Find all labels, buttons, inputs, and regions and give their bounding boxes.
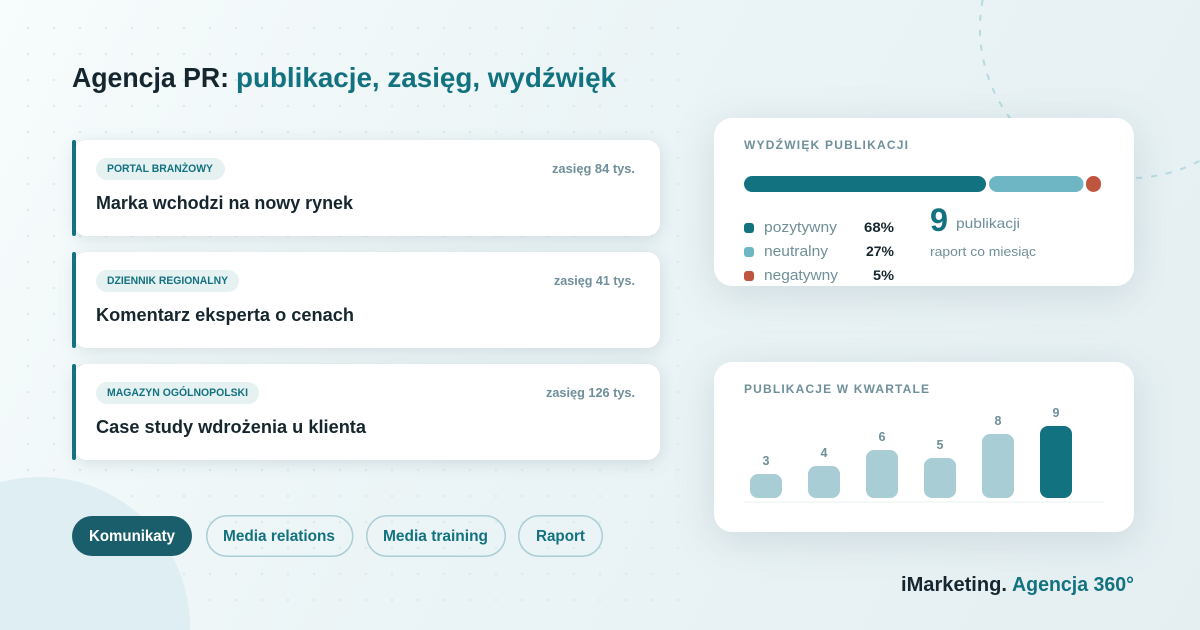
service pills	[72, 516, 602, 556]
bar chart	[744, 406, 1104, 503]
panel: publication card 2: DZIENNIK REGIONALNY	[107, 275, 229, 287]
brand footer	[901, 574, 1134, 596]
service pills: Media training	[383, 528, 488, 545]
publication count: publikacji	[956, 215, 1020, 231]
panel: publication card 1: Marka wchodzi na nowy rynek	[96, 192, 354, 213]
service pills: Media relations	[223, 528, 335, 545]
sentiment legend: 5%	[873, 268, 894, 283]
publication count: raport co miesiąc	[930, 244, 1037, 259]
bar chart: 3	[763, 454, 770, 468]
title: Agencja PR:	[72, 62, 229, 93]
panel: publication card 1	[72, 140, 660, 236]
panel: publication card 1: zasięg 84 tys.	[552, 161, 635, 176]
sentiment legend: neutralny	[764, 244, 829, 260]
panel: publication card 2: zasięg 41 tys.	[554, 273, 635, 288]
decorative dashed circle: top-right	[980, 0, 1200, 178]
panel: publication card 1: PORTAL BRANŻOWY	[107, 162, 214, 175]
sentiment heading: WYDŹWIĘK PUBLIKACJI	[744, 137, 908, 152]
sentiment legend: pozytywny	[764, 220, 838, 236]
title	[72, 62, 616, 93]
stacked sentiment bar	[744, 176, 1101, 192]
panel: publication card 2: Komentarz eksperta o cenach	[96, 304, 354, 325]
panel: publication card 3: Case study wdrożenia u klienta	[96, 416, 367, 437]
service pills: Komunikaty	[89, 528, 175, 545]
publication count	[930, 202, 1037, 259]
sentiment legend: 68%	[864, 220, 894, 235]
service pills: Raport	[536, 528, 586, 545]
sentiment legend: 27%	[866, 244, 894, 259]
sentiment legend	[744, 220, 894, 284]
bar chart: 8	[995, 414, 1002, 428]
panel: publication card 2	[72, 252, 660, 348]
decorative dot grid	[26, 26, 680, 602]
publication count: 9	[930, 202, 948, 238]
bar chart: 4	[821, 446, 828, 460]
panel: publication card 3	[72, 364, 660, 460]
panel: publication card 3: MAGAZYN OGÓLNOPOLSKI	[107, 386, 248, 399]
panel: publication card 3: zasięg 126 tys.	[546, 385, 635, 400]
chart heading: PUBLIKACJE W KWARTALE	[744, 382, 929, 396]
title: publikacje, zasięg, wydźwięk	[236, 62, 616, 93]
bar chart: 5	[937, 438, 944, 452]
panel: quarterly publications	[714, 362, 1134, 532]
sentiment legend: negatywny	[764, 268, 839, 284]
brand footer: Agencja 360°	[1012, 574, 1134, 596]
decorative blob: bottom-left circle	[0, 477, 190, 630]
bar chart: 6	[879, 430, 886, 444]
panel: sentiment	[714, 118, 1134, 286]
bar chart: 9	[1053, 406, 1060, 420]
brand footer: iMarketing.	[901, 574, 1007, 596]
